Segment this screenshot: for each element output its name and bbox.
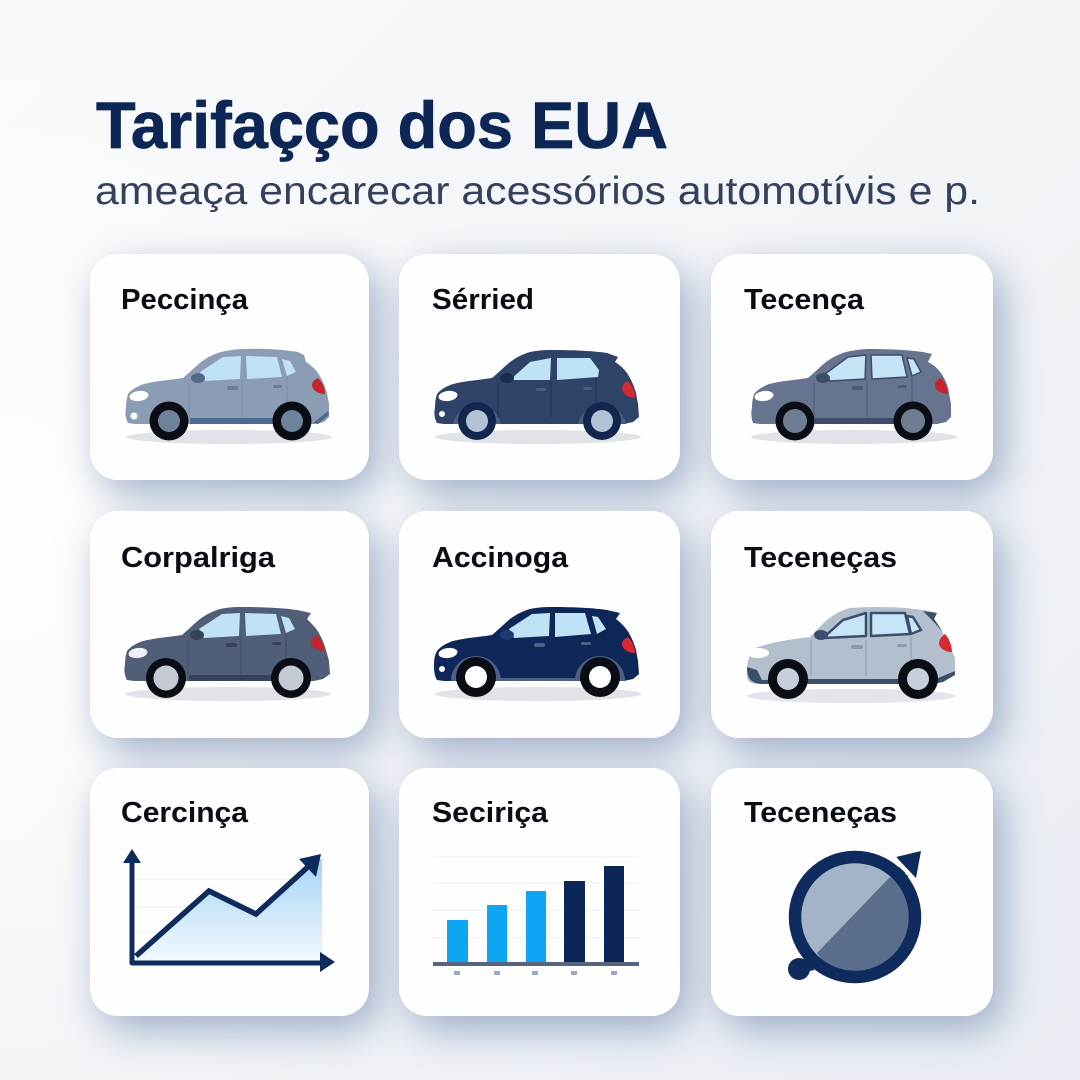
heading: Corpalriga: Corpalriga [121,542,276,574]
panel: Sérried [399,254,690,494]
icon: dark blue car [434,350,641,444]
panel: Accinoga [399,511,690,752]
heading: Seciriça: Seciriça [432,797,549,829]
panel: Corpalriga [90,511,379,752]
panel: Teceneças (gauge) [711,768,1003,1030]
panel: Teceneças (car) [711,511,1003,752]
heading: Accinoga: Accinoga [432,542,569,574]
panel: Seciriça [399,768,690,1030]
heading: Teceneças: Teceneças [744,542,897,574]
panel: Peccinça [90,254,379,494]
heading: Sérried: Sérried [432,284,534,316]
heading: Teceneças: Teceneças [744,797,897,829]
heading: Peccinça: Peccinça [121,284,249,316]
icon: navy car [434,607,641,701]
panel: Tecença [711,254,1003,494]
icon: charcoal car [124,607,331,701]
icon: slate car [751,349,957,444]
icon: silver car [746,607,956,703]
icon: circle with arrow [788,851,921,980]
subtitle: ameaça encarecar acessórios automotívis e p. [95,170,980,213]
heading: Tecença: Tecença [744,284,865,316]
heading: Cercinça: Cercinça [121,797,249,829]
icon: grey-blue car [125,349,332,444]
chart: bars [433,857,639,975]
panel: Cercinça [90,768,379,1030]
title: Tarifaçço dos EUA [96,88,668,162]
chart: rising line with area [123,849,335,972]
